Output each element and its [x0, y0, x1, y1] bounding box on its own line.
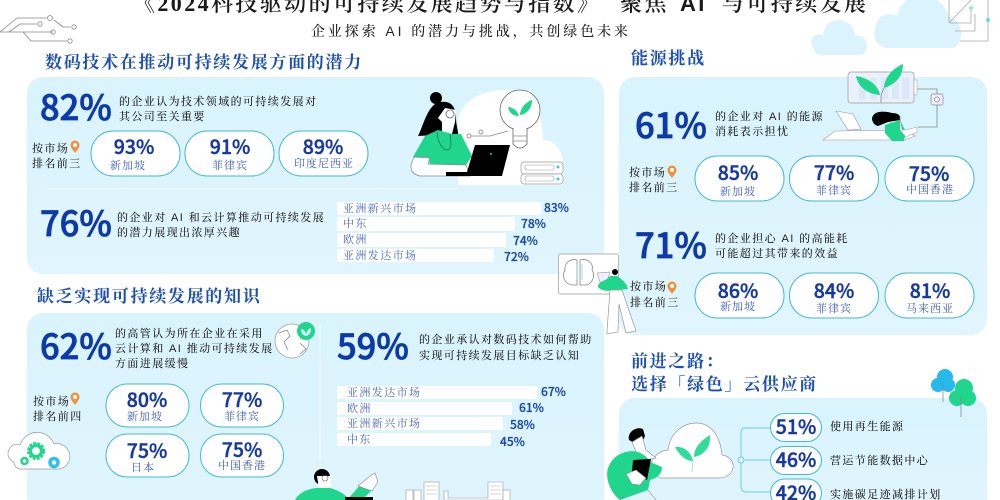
bar chart: regions 76%: 72% — [504, 248, 529, 265]
bar chart: regions 59%: 58% — [510, 416, 535, 433]
stat: 82%: 82% — [40, 80, 112, 130]
option: 46% data centre: 46% — [776, 444, 816, 473]
stat: 76%: 76% — [40, 196, 112, 246]
bar chart: regions 76%: 74% — [513, 232, 538, 249]
pill: Singapore 80%: 新加坡 — [127, 409, 163, 423]
heading: path forward: 选择「绿色」云供应商 — [631, 374, 818, 394]
bar chart: regions 59%: 67% — [541, 383, 566, 400]
market label with pin: 按市场 — [629, 165, 666, 179]
stat: 71%: 的企业担心 AI 的高能耗 — [715, 231, 849, 245]
illustration: brain screen and person — [558, 254, 636, 334]
stat: 61%: 61% — [635, 98, 707, 148]
pill: Malaysia 81% — [885, 273, 974, 318]
pill: Philippines 77%: 菲律宾 — [224, 409, 260, 423]
pill: Hong Kong 75%: 中国香港 — [906, 182, 954, 196]
market label with pin — [630, 279, 680, 309]
market label with pin: 按市场 — [33, 394, 70, 408]
pill: Philippines 84%: 菲律宾 — [816, 301, 852, 315]
stat: 82% — [40, 80, 317, 130]
market label with pin: 排名前三 — [630, 295, 680, 309]
pill: Singapore 86%: 86% — [718, 275, 758, 304]
pill: Philippines 84% — [790, 273, 878, 318]
panel: digital potential — [27, 77, 604, 274]
pill: Singapore 80% — [106, 384, 189, 427]
bar chart: regions 76%: 78% — [521, 215, 546, 232]
pill: Philippines 91%: 91% — [210, 131, 250, 160]
panel: energy challenge — [619, 64, 987, 335]
icon: circuit top left — [0, 16, 76, 43]
icon: trees — [931, 369, 976, 417]
pill: Japan 75% — [106, 434, 189, 477]
pill: Hong Kong 75%: 75% — [909, 158, 949, 187]
pill: Philippines 77%: 77% — [222, 384, 262, 413]
stat: 59%: 实现可持续发展目标缺乏认知 — [419, 348, 580, 362]
pill: Philippines 77%: 77% — [814, 157, 854, 186]
heading: path forward — [631, 352, 818, 394]
panel: path forward — [607, 398, 987, 500]
heading: digital potential: 数码技术在推动可持续发展方面的潜力 — [45, 52, 363, 72]
pill: Singapore 85%: 新加坡 — [720, 184, 756, 198]
pill: Japan 75%: 75% — [127, 435, 167, 464]
stat: 62%: 方面进展缓慢 — [115, 356, 189, 370]
connector lines — [741, 428, 771, 492]
pill: Singapore 93%: 新加坡 — [110, 158, 146, 172]
market label with pin — [32, 140, 82, 170]
bar chart: regions 59%: 61% — [519, 399, 544, 416]
market label with pin: 按市场 — [32, 141, 69, 155]
pill: Malaysia 81%: 马来西亚 — [906, 301, 954, 315]
market label with pin — [629, 165, 679, 194]
illustration: woman with laptop and bulb — [411, 90, 563, 185]
pill: Singapore 80%: 80% — [127, 384, 167, 413]
bar chart: regions 76%: 欧洲 — [343, 232, 368, 246]
stat: 76%: 的企业对 AI 和云计算推动可持续发展 — [117, 210, 325, 224]
option: 51% renewable — [770, 411, 904, 442]
pill: Indonesia 89%: 89% — [303, 131, 343, 160]
pill: Indonesia 89%: 印度尼西亚 — [294, 156, 354, 170]
market label with pin: 排名前三 — [32, 156, 82, 170]
bar chart: regions 59% — [337, 383, 566, 450]
icon: clouds top right — [811, 0, 961, 55]
pill: Singapore 93%: 93% — [114, 131, 154, 160]
illustration: battery with plant and reclining woman — [823, 64, 943, 141]
bar chart: regions 59%: 亚洲发达市场 — [347, 385, 421, 399]
bar chart: regions 76% — [337, 199, 569, 265]
stat: 61%: 消耗表示担忧 — [715, 124, 789, 138]
heading: lack of knowledge: 缺乏实现可持续发展的知识 — [37, 286, 262, 306]
option: 42% carbon — [770, 477, 942, 500]
pill: Indonesia 89% — [279, 131, 368, 176]
pill: Hong Kong 75% — [885, 156, 974, 201]
pill: Philippines 77% — [790, 156, 878, 201]
option: 51% renewable: 使用再生能源 — [830, 419, 904, 433]
stat: 61% — [635, 98, 824, 148]
pill: Japan 75%: 日本 — [131, 460, 155, 474]
pill: Singapore 85% — [695, 156, 784, 201]
pill: Singapore 86% — [695, 273, 784, 318]
illustration: man with tablet and cloud — [607, 423, 733, 500]
pill: Hong Kong 75%: 中国香港 — [218, 458, 266, 472]
stat: 71%: 可能超过其带来的效益 — [715, 246, 839, 260]
bar chart: regions 59%: 中东 — [347, 432, 372, 446]
heading: energy challenge: 能源挑战 — [631, 48, 706, 68]
pill: Singapore 86%: 新加坡 — [720, 299, 756, 313]
bar chart: regions 76%: 83% — [544, 199, 569, 216]
bar chart: regions 76%: 亚洲发达市场 — [343, 248, 417, 262]
market label with pin: 排名前四 — [33, 409, 83, 423]
bar chart: regions 59%: 亚洲新兴市场 — [347, 416, 421, 430]
market label with pin: 排名前三 — [629, 180, 679, 194]
subtitle: 企业探索 AI 的潜力与挑战，共创绿色未来 — [311, 23, 631, 40]
stat: 82%: 其公司至关重要 — [119, 109, 206, 123]
bar chart: regions 76%: 亚洲新兴市场 — [343, 201, 417, 215]
stat: 61%: 的企业对 AI 的能源 — [715, 109, 824, 123]
stat: 62%: 的高管认为所在企业在采用 — [115, 326, 264, 340]
bar chart: regions 76%: 中东 — [343, 216, 368, 230]
bar chart: regions 59%: 欧洲 — [347, 401, 372, 415]
stat: 62%: 62% — [40, 319, 112, 369]
icon: circuit top right — [949, 0, 990, 41]
market label with pin — [33, 392, 83, 423]
pill: Singapore 85%: 85% — [718, 157, 758, 186]
bar chart: regions 59%: 45% — [500, 433, 525, 450]
stat: 82%: 的企业认为技术领域的可持续发展对 — [119, 94, 317, 108]
stat: 62% — [40, 319, 274, 370]
pill: Malaysia 81%: 81% — [910, 275, 950, 304]
pill: Hong Kong 75%: 75% — [222, 434, 262, 463]
stat: 59% — [337, 319, 593, 369]
illustration: city skyline — [406, 482, 510, 500]
pill: Philippines 91%: 菲律宾 — [212, 158, 248, 172]
stat: 59%: 的企业承认对数码技术如何帮助 — [419, 332, 593, 346]
stat: 71%: 71% — [635, 218, 707, 268]
pill: Hong Kong 75% — [200, 434, 284, 477]
stat: 76%: 的潜力展现出浓厚兴趣 — [117, 225, 241, 239]
illustration: man pointing — [295, 469, 378, 500]
connector node — [738, 457, 744, 463]
stat: 62%: 云计算和 AI 推动可持续发展 — [115, 341, 274, 355]
pill: Philippines 77% — [200, 384, 284, 427]
panel: lack of knowledge — [8, 313, 604, 500]
market label with pin: 按市场 — [630, 279, 667, 293]
option: 46% data centre: 营运节能数据中心 — [830, 453, 929, 467]
stat: 71% — [635, 218, 849, 268]
pill: Philippines 84%: 84% — [814, 275, 854, 304]
pill: Singapore 93% — [91, 131, 180, 176]
stat: 59%: 59% — [337, 319, 409, 369]
pill: Philippines 77%: 菲律宾 — [816, 183, 852, 197]
stat: 76% — [40, 196, 325, 246]
option: 46% data centre — [770, 444, 929, 474]
option: 51% renewable: 51% — [776, 411, 816, 440]
icon: globe with leaf — [275, 322, 315, 358]
icon: cloud with gears — [8, 432, 70, 469]
heading: path forward: 前进之路： — [631, 352, 724, 371]
pill: Philippines 91% — [185, 131, 274, 176]
